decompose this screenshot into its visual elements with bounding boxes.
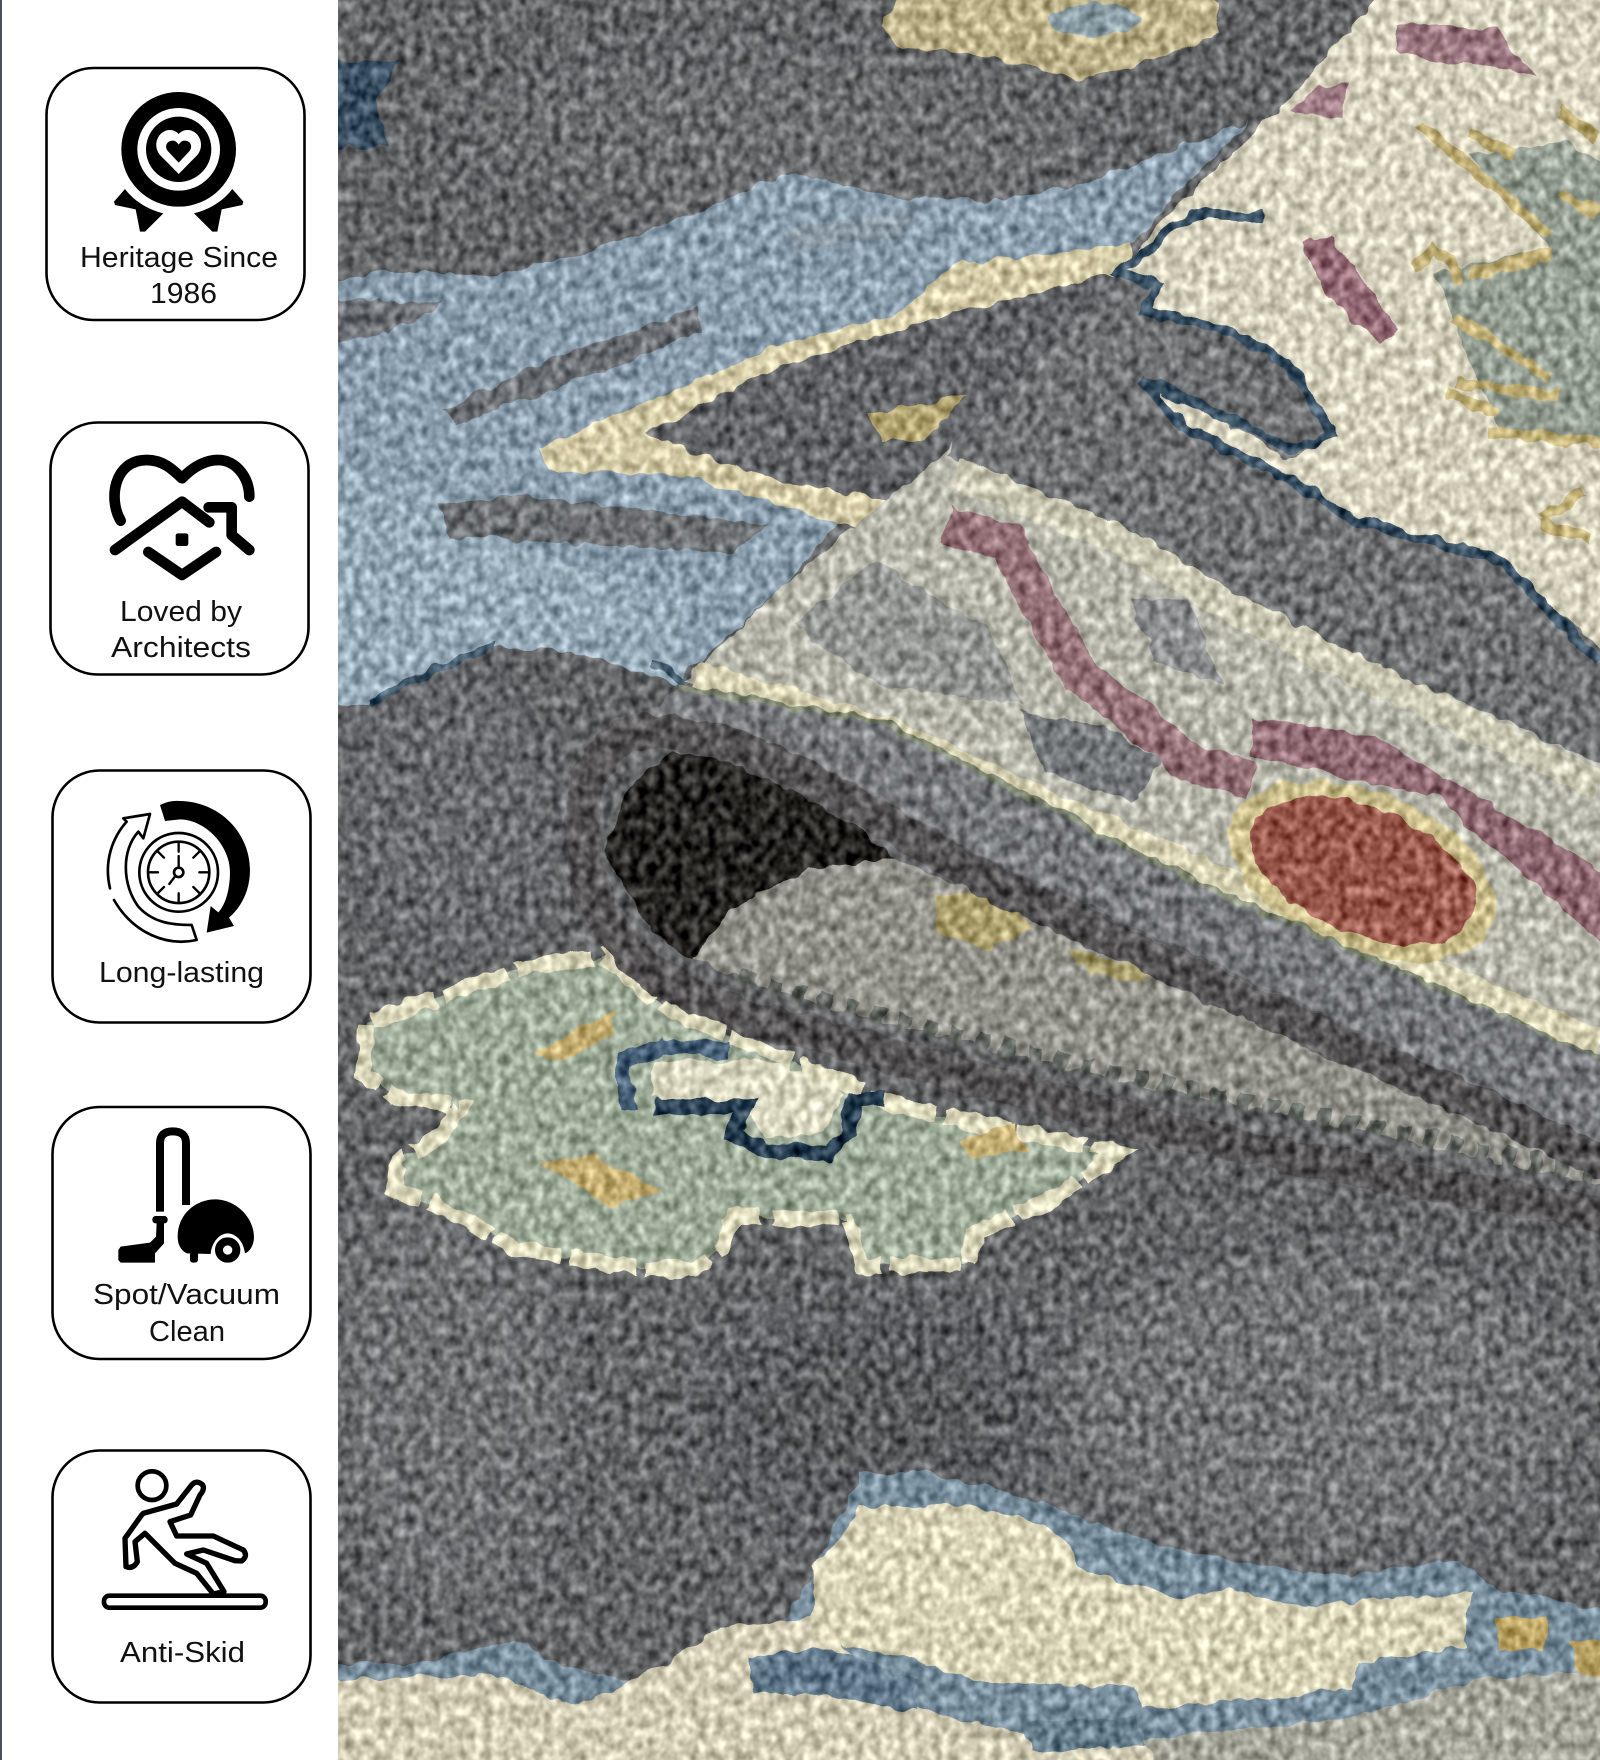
patterned cream and grey band xyxy=(677,443,1600,1078)
rug binding around the fold xyxy=(582,732,1600,1220)
label: Loved by xyxy=(120,596,243,628)
green and yellow motif xyxy=(1434,143,1600,449)
light blue band xyxy=(314,123,1246,709)
dark cavity under the fold xyxy=(606,752,893,960)
icon: person slipping xyxy=(104,1471,266,1608)
yellow medallion with dark centre xyxy=(539,245,1128,528)
sidebar: feature badges xyxy=(0,0,338,1760)
badge: Heritage Since 1986 xyxy=(46,68,304,320)
badge: Anti-Skid xyxy=(52,1450,310,1702)
grey tufts above the binding xyxy=(640,689,1600,1156)
badge: Spot/Vacuum Clean xyxy=(52,1107,310,1359)
bottom cream and blue motif xyxy=(314,1473,1600,1760)
pink motifs xyxy=(1393,25,1537,76)
label: Architects xyxy=(111,632,251,664)
label: 1986 xyxy=(150,278,217,310)
icon: clock with circular arrows xyxy=(108,801,250,942)
label: Long-lasting xyxy=(99,957,264,989)
cream back of rug xyxy=(1119,0,1600,673)
green floral medallion xyxy=(364,956,1118,1269)
label: Anti-Skid xyxy=(120,1637,245,1669)
navy outline on the back xyxy=(1119,214,1600,662)
underside band of the fold xyxy=(691,859,1600,1192)
icon: heart and house xyxy=(115,460,249,575)
badge: Loved by Architects xyxy=(50,422,308,674)
grey rug border on the back xyxy=(947,269,1600,774)
navy motif top left xyxy=(314,62,399,152)
icon: vacuum cleaner xyxy=(118,1131,254,1263)
label: Clean xyxy=(149,1316,225,1348)
badge: Long-lasting xyxy=(52,770,310,1022)
top yellow flower motif xyxy=(881,0,1218,79)
label: Heritage Since xyxy=(80,242,278,274)
label: Spot/Vacuum xyxy=(93,1279,280,1311)
photo: folded rug close-up xyxy=(338,0,1600,1760)
icon: rosette with heart xyxy=(114,92,243,232)
